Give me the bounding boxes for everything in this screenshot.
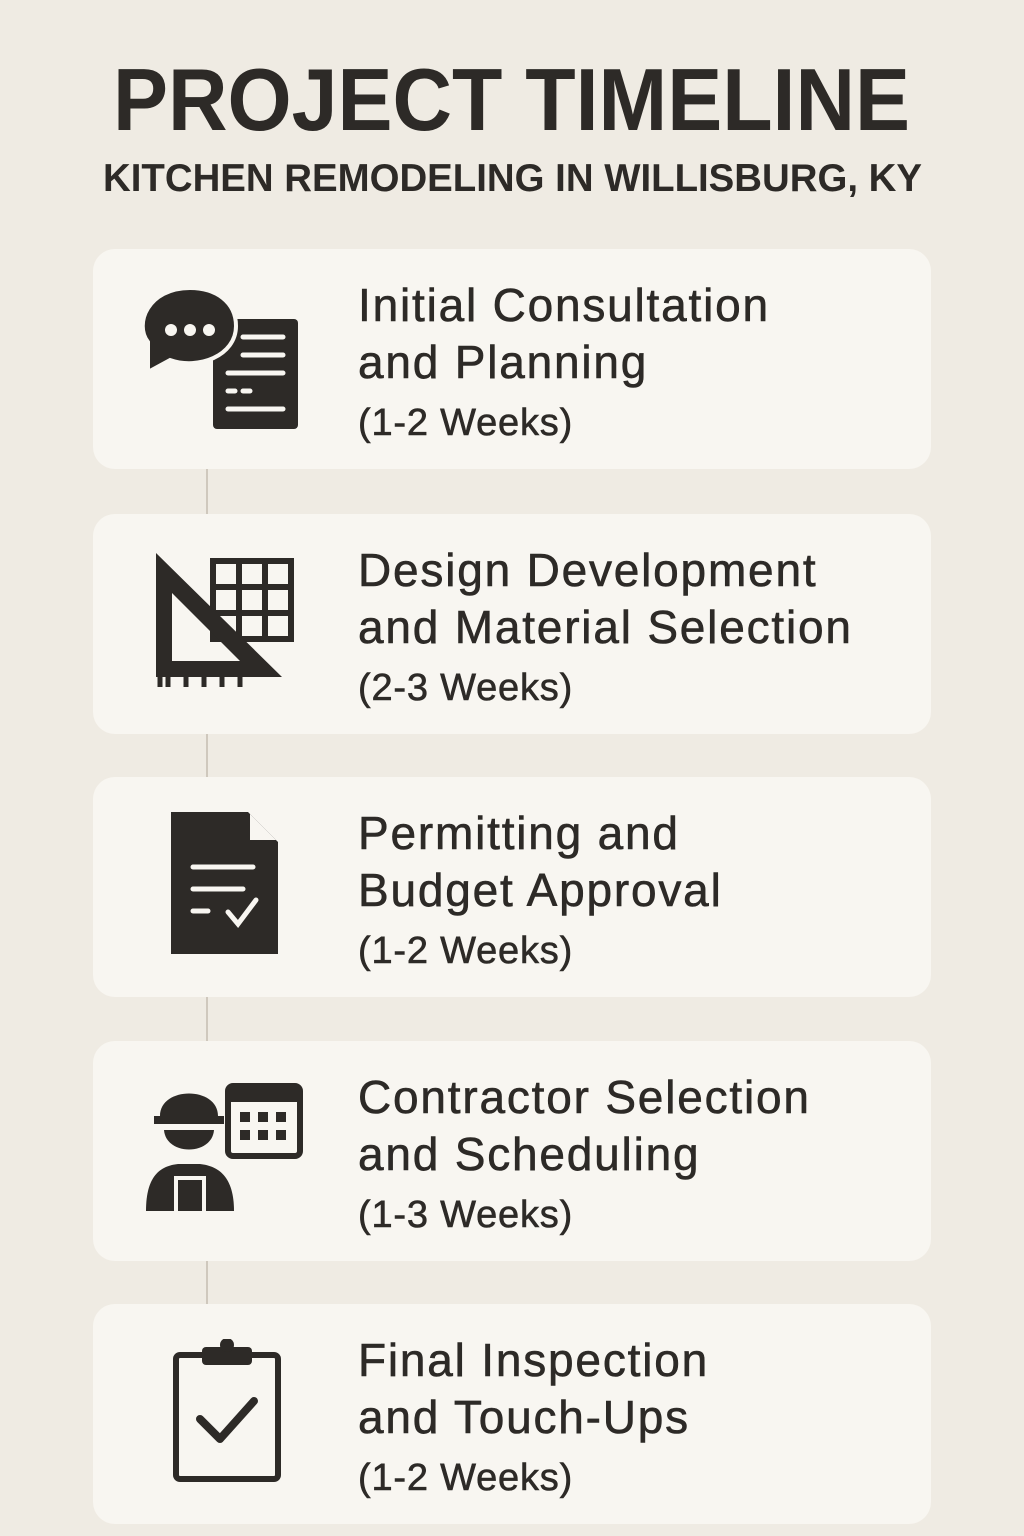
icon: document with check	[171, 812, 278, 954]
icon: chat and document	[144, 290, 298, 429]
title: PROJECT TIMELINE	[113, 50, 910, 149]
text: Final Inspection	[358, 1334, 709, 1386]
title: KITCHEN REMODELING IN WILLISBURG, KY	[103, 157, 922, 200]
text: and Touch-Ups	[358, 1391, 690, 1443]
text	[358, 1334, 709, 1499]
text	[358, 807, 723, 972]
text: (1-3 Weeks)	[358, 1194, 573, 1236]
text	[358, 1071, 811, 1236]
text: (1-2 Weeks)	[358, 930, 573, 972]
text: (2-3 Weeks)	[358, 667, 573, 709]
icon: worker and calendar	[146, 1083, 303, 1211]
card 2: design	[93, 514, 931, 734]
text: and Planning	[358, 336, 648, 388]
text: Design Development	[358, 544, 817, 596]
title	[103, 50, 922, 200]
text: Initial Consultation	[358, 279, 770, 331]
text: and Material Selection	[358, 601, 853, 653]
card 3: permitting	[93, 777, 931, 997]
text: Budget Approval	[358, 864, 723, 916]
card 4: contractor	[93, 1041, 931, 1261]
text	[358, 279, 770, 444]
text	[358, 544, 853, 709]
card 5: final inspection	[93, 1304, 931, 1524]
text: (1-2 Weeks)	[358, 1457, 573, 1499]
card 1: consultation	[93, 249, 931, 469]
icon: triangle ruler and grid	[156, 553, 294, 687]
text: Contractor Selection	[358, 1071, 811, 1123]
icon: clipboard check	[173, 1339, 281, 1482]
text: Permitting and	[358, 807, 680, 859]
text: and Scheduling	[358, 1128, 700, 1180]
text: (1-2 Weeks)	[358, 402, 573, 444]
